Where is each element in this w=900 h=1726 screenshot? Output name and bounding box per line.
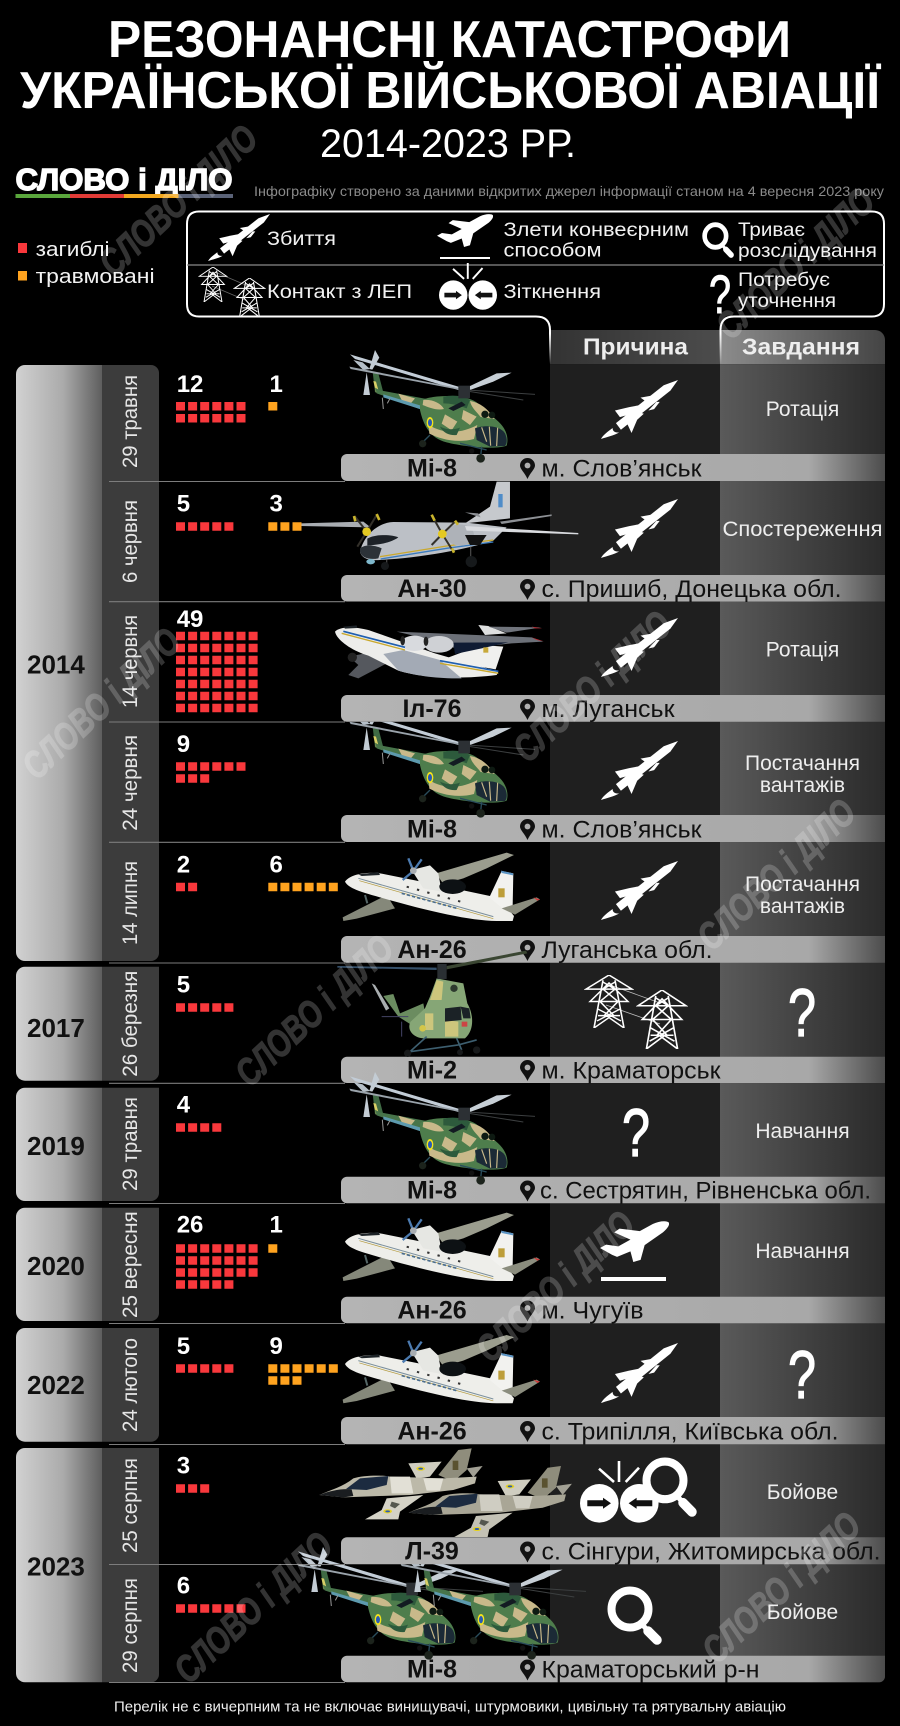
row: 29 травня 2014, Мі-8: м. Слов’янськ (542, 456, 702, 483)
row: 29 травня 2019, Мі-8 (109, 1072, 885, 1205)
row: 24 лютого 2022, Ан-26: ? (788, 1337, 816, 1413)
row: 25 серпня 2023, Л-39: Бойове (767, 1481, 838, 1504)
year labels: 2022 (27, 1370, 85, 1400)
aircraft: Mi-2 (337, 951, 527, 1057)
row: 6 червня 2014, Ан-30: 5 (177, 491, 190, 518)
watermarks: СЛОВО і ДІЛО (505, 604, 680, 771)
row: 24 червня 2014, Мі-8: 24 червня (119, 735, 142, 831)
row: 14 липня 2014, Ан-26: Постачання (745, 873, 860, 896)
row: 24 червня 2014, Мі-8: 9 (177, 731, 190, 758)
year labels: 2019 (27, 1131, 85, 1161)
row: 29 серпня 2023, Мі-8: 29 серпня (119, 1578, 142, 1673)
row: 26 березня 2017, Мі-2: 5 (177, 972, 190, 999)
row: 29 травня 2019, Мі-8: с. Сестрятин, Рівненська обл. (540, 1178, 871, 1205)
aircraft: two L-39 jets (319, 1448, 572, 1537)
legend icons and labels: Контакт з ЛЕП (267, 281, 412, 303)
title: УКРАЇНСЬКОЇ ВІЙСЬКОВОЇ АВІАЦІЇ (20, 61, 882, 120)
row: 29 травня 2014, Мі-8: 1 (270, 371, 283, 398)
legend icons and labels: Потребує (738, 269, 830, 291)
column: cause: Причина (583, 333, 688, 359)
row: 29 серпня 2023, Мі-8: Мі-8 (407, 1656, 457, 1684)
row: 25 вересня 2020, Ан-26: 26 (177, 1212, 203, 1239)
row: 29 травня 2014, Мі-8: Ротація (766, 398, 839, 421)
watermarks: СЛОВО і ДІЛО (14, 621, 189, 788)
row: 14 липня 2014, Ан-26: Луганська обл. (542, 937, 712, 964)
legend icons and labels: способом (504, 240, 602, 262)
row: 14 червня 2014, Іл-76: м. Луганськ (542, 696, 675, 723)
year labels: 2020 (27, 1251, 85, 1281)
row: 24 лютого 2022, Ан-26: 24 лютого (119, 1338, 142, 1432)
legend icons and labels: Збиття (267, 228, 336, 250)
row: 25 вересня 2020, Ан-26: 25 вересня (119, 1211, 142, 1318)
legend icons and labels: Злети конвеєрним (504, 219, 689, 241)
legend icons and labels: Зіткнення (504, 281, 601, 303)
column: mission (720, 330, 885, 1682)
row: 24 лютого 2022, Ан-26: с. Трипілля, Київська обл. (542, 1419, 838, 1446)
row: 14 липня 2014, Ан-26: вантажів (760, 895, 845, 918)
title (20, 11, 882, 166)
legend icons and labels (187, 214, 884, 325)
footer note: Перелік не є вичерпним та не включає винищувачі, штурмовики, цивільну та рятувальну авіацію (114, 1698, 786, 1716)
row: 29 травня 2019, Мі-8: 29 травня (119, 1097, 142, 1191)
row: 26 березня 2017, Мі-2: 26 березня (119, 971, 142, 1077)
row: 14 червня 2014, Іл-76: 14 червня (119, 615, 142, 708)
row: 26 березня 2017, Мі-2: м. Краматорськ (542, 1058, 721, 1084)
legend: casualties: загиблі (36, 239, 110, 261)
legend: casualties (18, 239, 155, 288)
legend icons and labels: розслідування (738, 240, 877, 262)
row: 26 березня 2017, Мі-2 (109, 951, 885, 1084)
row: 25 серпня 2023, Л-39: 25 серпня (119, 1458, 142, 1553)
row: 24 лютого 2022, Ан-26 (109, 1333, 885, 1446)
row: 24 червня 2014, Мі-8 (109, 722, 885, 843)
row: 25 вересня 2020, Ан-26: 1 (270, 1212, 283, 1239)
legend icons and labels: Триває (738, 219, 805, 241)
watermarks: СЛОВО і ДІЛО (468, 1204, 643, 1371)
row: 6 червня 2014, Ан-30: Спостереження (722, 518, 882, 541)
column: cause (550, 330, 720, 1682)
row: 14 червня 2014, Іл-76 (109, 606, 885, 723)
row: 29 травня 2019, Мі-8: Мі-8 (407, 1177, 457, 1205)
row: 29 травня 2014, Мі-8 (109, 350, 885, 483)
row: 25 вересня 2020, Ан-26: Ан-26 (397, 1297, 467, 1325)
aircraft: An-30 (300, 482, 578, 570)
year labels: 2023 (27, 1552, 85, 1582)
row: 29 травня 2014, Мі-8: 29 травня (119, 375, 142, 468)
title: РЕЗОНАНСНІ КАТАСТРОФИ (108, 11, 791, 69)
watermarks: СЛОВО і ДІЛО (166, 1525, 341, 1692)
row: 6 червня 2014, Ан-30: Ан-30 (397, 575, 467, 603)
legend box outline (187, 212, 884, 364)
legend icons and labels: уточнення (738, 290, 836, 312)
legend: casualties: травмовані (36, 266, 155, 288)
row: 14 липня 2014, Ан-26: 2 (177, 852, 190, 879)
row: 24 червня 2014, Мі-8: вантажів (760, 774, 845, 797)
row: 25 вересня 2020, Ан-26: Навчання (755, 1240, 850, 1263)
row: 25 серпня 2023, Л-39: 3 (177, 1452, 190, 1479)
row: 24 лютого 2022, Ан-26: 5 (177, 1333, 190, 1360)
row: 29 травня 2019, Мі-8: 4 (177, 1092, 191, 1119)
row: 25 вересня 2020, Ан-26: м. Чугуїв (542, 1298, 644, 1325)
legend icons and labels: ? (709, 265, 731, 325)
row: 14 червня 2014, Іл-76: 49 (177, 606, 203, 633)
logo: Слово і Діло: СЛОВО і ДІЛО (16, 162, 232, 197)
year labels (27, 649, 85, 1582)
row: 29 серпня 2023, Мі-8: Краматорський р-н (542, 1657, 760, 1684)
row: 14 липня 2014, Ан-26: 6 (270, 852, 283, 879)
row: 6 червня 2014, Ан-30: 3 (270, 491, 283, 518)
year labels: 2017 (27, 1013, 85, 1043)
row: 24 лютого 2022, Ан-26: 9 (270, 1333, 283, 1360)
row: 14 липня 2014, Ан-26: 14 липня (119, 861, 142, 945)
aircraft: Il-76 (335, 625, 544, 678)
row: 24 червня 2014, Мі-8: м. Слов’янськ (542, 816, 702, 844)
row: 29 серпня 2023, Мі-8: 6 (177, 1572, 190, 1599)
row: 26 березня 2017, Мі-2: Мі-2 (407, 1056, 457, 1084)
row: 29 серпня 2023, Мі-8: Бойове (767, 1601, 838, 1624)
row: 14 червня 2014, Іл-76: Іл-76 (403, 695, 461, 723)
row: 6 червня 2014, Ан-30 (109, 482, 885, 603)
row: 14 червня 2014, Іл-76: Ротація (766, 638, 839, 662)
row: 29 травня 2014, Мі-8: Мі-8 (407, 455, 457, 483)
row: 25 серпня 2023, Л-39: Л-39 (405, 1538, 459, 1566)
year labels: 2014 (27, 649, 85, 679)
row: 29 травня 2019, Мі-8: ? (622, 1095, 650, 1171)
row: 14 липня 2014, Ан-26 (109, 852, 885, 964)
row: 6 червня 2014, Ан-30: с. Пришиб, Донецька обл. (542, 576, 842, 603)
row: 25 вересня 2020, Ан-26 (109, 1211, 885, 1325)
row: 29 травня 2014, Мі-8: 12 (177, 371, 203, 398)
watermarks: СЛОВО і ДІЛО (91, 118, 266, 285)
row: 24 червня 2014, Мі-8: Постачання (745, 752, 860, 775)
row: 6 червня 2014, Ан-30: 6 червня (119, 500, 142, 583)
watermarks: СЛОВО і ДІЛО (227, 928, 402, 1095)
title: 2014-2023 РР. (320, 122, 576, 166)
row: 24 червня 2014, Мі-8: Мі-8 (407, 816, 457, 844)
row: 25 серпня 2023, Л-39: с. Сінгури, Житомирська обл. (542, 1539, 880, 1566)
row: 26 березня 2017, Мі-2: ? (788, 975, 816, 1051)
row: 14 липня 2014, Ан-26: Ан-26 (397, 936, 467, 964)
column: mission: Завдання (742, 333, 860, 359)
row: 25 серпня 2023, Л-39 (109, 1448, 885, 1566)
row: 29 травня 2019, Мі-8: Навчання (755, 1120, 850, 1143)
source note: Інфографіку створено за даними відкритих джерел інформації станом на 4 вересня 2023 року (254, 183, 884, 199)
row: 29 серпня 2023, Мі-8 (109, 1547, 885, 1684)
year blocks and date columns (16, 365, 159, 1682)
row: 24 лютого 2022, Ан-26: Ан-26 (397, 1418, 467, 1446)
